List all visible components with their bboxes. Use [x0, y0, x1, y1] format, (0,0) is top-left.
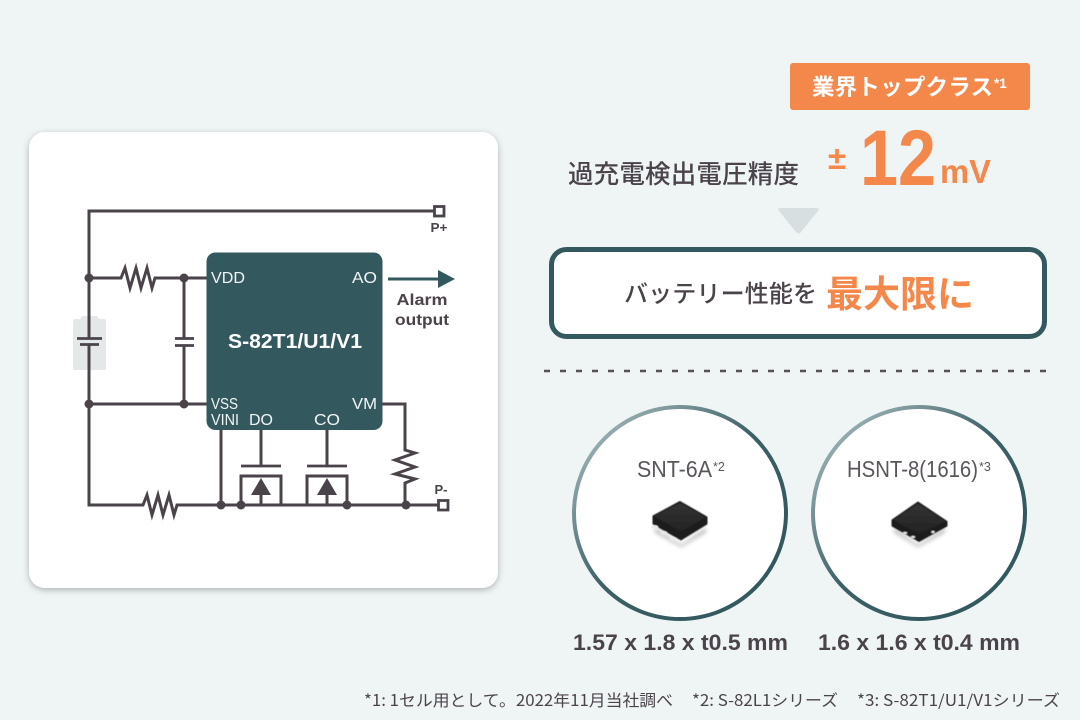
dimensions: SNT-6A: 1.57 x 1.8 x t0.5 mm: [573, 630, 788, 655]
IC pin labels: VSS: [211, 396, 238, 413]
value: ±12 mV: mV: [940, 153, 991, 190]
package: HSNT-8(1616): *3: [979, 460, 991, 474]
package name: SNT-6A: [637, 456, 712, 482]
IC pin labels: [211, 270, 377, 429]
panel: circuit diagram: [29, 132, 498, 588]
footnotes: *1: 1セル用として。2022年11月当社調べ: [364, 687, 673, 711]
mosfet triangles and junction dots: [84, 274, 410, 510]
package name: HSNT-8(1616): [847, 456, 978, 482]
terminal P-: P-: [434, 483, 448, 497]
icon: chip: [892, 502, 947, 547]
terminal P+: [430, 206, 448, 235]
IC name: S-82T1/U1/V1: [228, 331, 362, 353]
dimensions: HSNT-8: 1.6 x 1.6 x t0.4 mm: [818, 630, 1020, 655]
badge: industry top class: *1: [994, 76, 1007, 91]
terminal P-: [434, 483, 448, 510]
footnotes: *3: S-82T1/U1/V1シリーズ: [857, 687, 1060, 711]
package: SNT-6A: [574, 407, 786, 619]
IC pin labels: VDD: [211, 270, 245, 287]
value: ±12 mV: 12: [860, 113, 936, 202]
callout: maximize battery performance: [552, 250, 1044, 336]
IC pin labels: CO: [314, 412, 340, 429]
footnotes: *2: S-82L1シリーズ: [692, 687, 838, 711]
card background: [29, 132, 498, 588]
divider: [544, 370, 1047, 372]
IC pin labels: DO: [249, 412, 273, 429]
callout: maximize battery performance: 最大限に: [826, 264, 974, 318]
alarm output label: [395, 292, 450, 329]
icon: battery: [73, 316, 106, 370]
value: ±12 mV: [828, 113, 991, 202]
badge: industry top class: [790, 63, 1030, 110]
package: HSNT-8(1616): [813, 407, 1025, 619]
footnotes: [364, 687, 1060, 711]
value: ±12 mV: ±: [828, 140, 846, 176]
arrow: down triangle: [778, 208, 819, 234]
IC pin labels: VM: [352, 396, 377, 413]
alarm output label: Alarm: [396, 292, 448, 309]
IC pin labels: VINI: [211, 412, 239, 429]
IC pin labels: AO: [352, 270, 377, 287]
package: SNT-6A: *2: [713, 460, 725, 474]
icon: chip: [652, 502, 707, 547]
wiring: [89, 211, 438, 515]
capacitor plates: [77, 338, 347, 466]
circle: [813, 407, 1025, 619]
terminal P+: P+: [430, 221, 448, 235]
arrow: alarm output: [388, 270, 455, 288]
badge: industry top class: 業界トップクラス: [812, 70, 993, 102]
IC block: [206, 252, 382, 430]
circle: [574, 407, 786, 619]
label: overcharge detection voltage accuracy: 過充電検出電圧精度: [568, 154, 799, 191]
callout: maximize battery performance: バッテリー性能を: [624, 274, 817, 309]
alarm output label: output: [395, 312, 450, 329]
